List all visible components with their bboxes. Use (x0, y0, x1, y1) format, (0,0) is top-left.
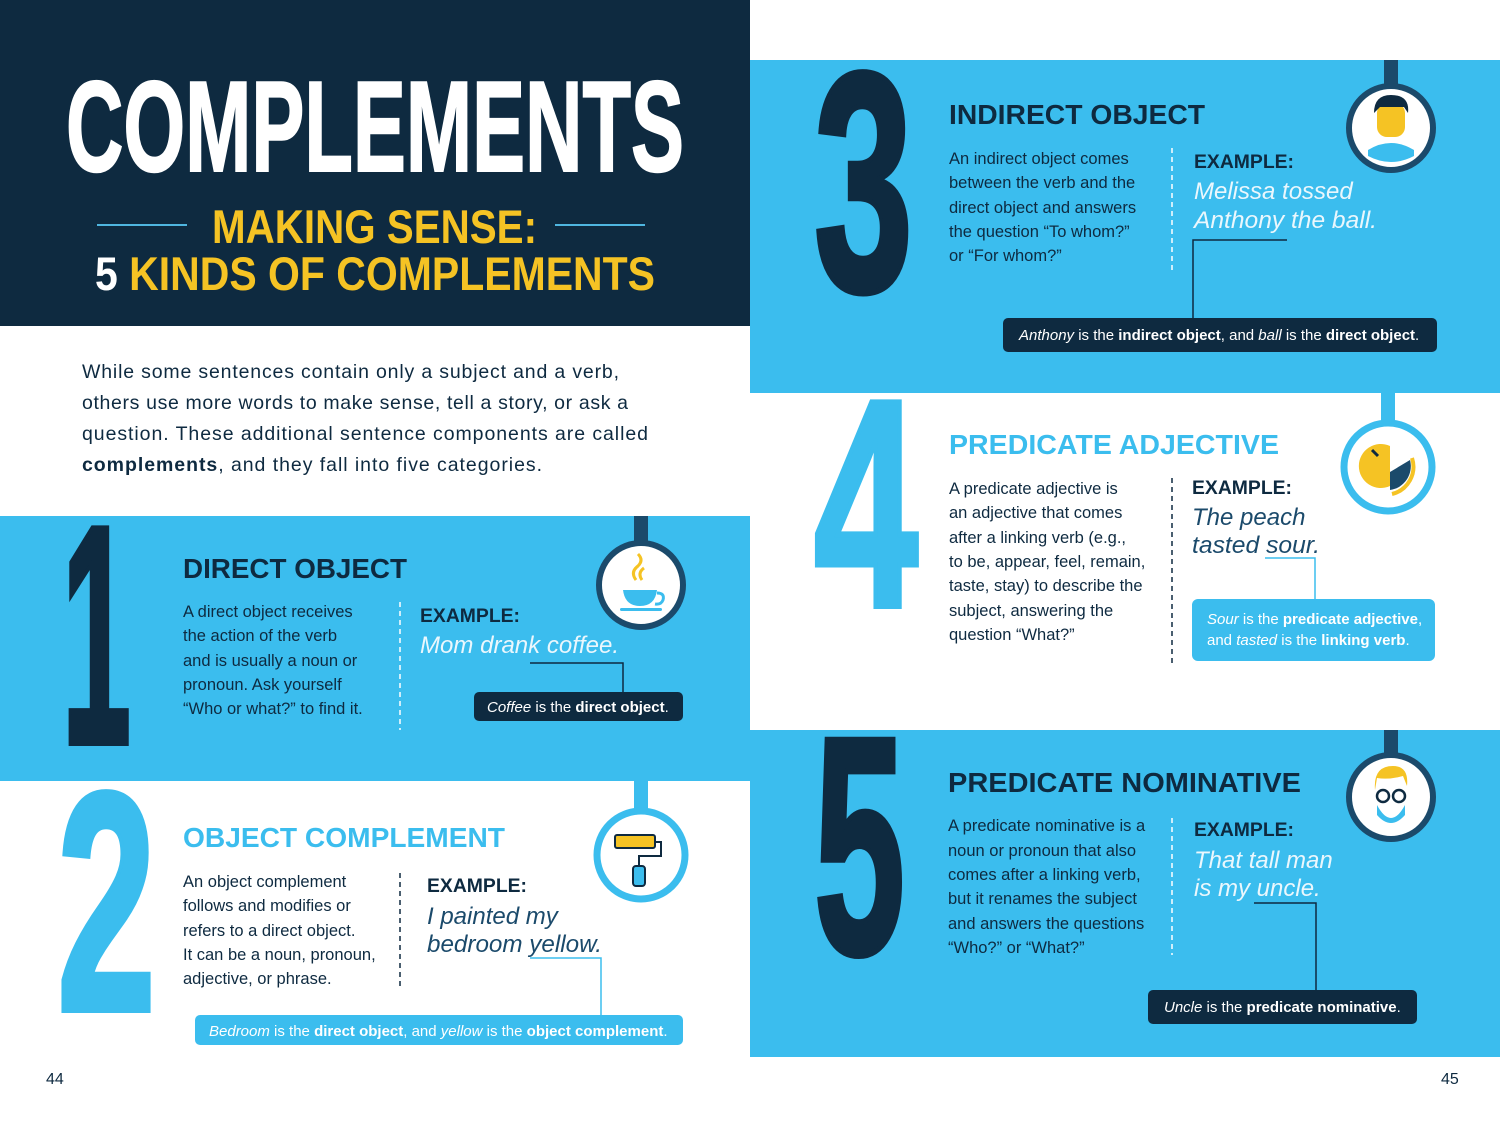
numeral 3: 3 (814, 9, 913, 357)
description: taste, stay) to describe the (949, 577, 1143, 595)
callout (195, 1015, 683, 1045)
description: the question “To whom?” (949, 223, 1130, 241)
heading: PREDICATE NOMINATIVE (948, 767, 1301, 798)
numeral 4: 4 (814, 338, 919, 669)
example: Anthony the ball. (1192, 207, 1377, 234)
description (949, 480, 1145, 644)
example: is my uncle. (1194, 875, 1321, 902)
callout (474, 692, 683, 721)
intro text (82, 361, 648, 476)
page number left: 44 (46, 1071, 64, 1088)
numeral 5: 5 (814, 672, 905, 1019)
description: after a linking verb (e.g., (949, 529, 1126, 547)
example: Melissa tossed (1194, 178, 1353, 205)
icon: man with stripes (1349, 60, 1433, 170)
description: A predicate adjective is (949, 480, 1118, 498)
intro text: While some sentences contain only a subject and a verb, (82, 361, 619, 383)
example (1192, 152, 1377, 234)
example: EXAMPLE: (1194, 820, 1294, 841)
header panel (0, 0, 750, 326)
example: EXAMPLE: (420, 606, 520, 627)
example: Mom drank coffee. (420, 632, 619, 659)
example: I painted my (427, 903, 560, 930)
subtitle (95, 200, 655, 300)
description: An indirect object comes (949, 150, 1129, 168)
panel 1: direct object (0, 462, 750, 810)
description: between the verb and the (949, 174, 1135, 192)
callout: Anthony is the indirect object, and ball is the direct object. (1018, 327, 1419, 344)
callout (1148, 990, 1417, 1024)
description (183, 873, 376, 988)
example (427, 876, 602, 958)
description (183, 603, 363, 718)
description: pronoun. Ask yourself (183, 676, 342, 694)
example: EXAMPLE: (427, 876, 527, 897)
example (1192, 478, 1320, 559)
example: That tall man (1194, 847, 1333, 874)
description: and is usually a noun or (183, 652, 358, 670)
description: An object complement (183, 873, 347, 891)
description: A direct object receives (183, 603, 353, 621)
description: direct object and answers (949, 199, 1136, 217)
heading: INDIRECT OBJECT (949, 99, 1205, 130)
description (948, 817, 1146, 957)
description (949, 150, 1136, 265)
description: but it renames the subject (948, 890, 1137, 908)
description: It can be a noun, pronoun, (183, 946, 376, 964)
heading: OBJECT COMPLEMENT (183, 822, 505, 853)
heading: PREDICATE ADJECTIVE (949, 429, 1279, 460)
subtitle: MAKING SENSE: (212, 200, 537, 253)
example (420, 606, 619, 659)
subtitle: 5 KINDS OF COMPLEMENTS (95, 247, 655, 300)
icon: lemon (1344, 393, 1432, 511)
example: tasted sour. (1192, 532, 1320, 559)
panel 1: direct object: 1 (62, 462, 131, 810)
description: or “For whom?” (949, 247, 1062, 265)
description: adjective, or phrase. (183, 970, 332, 988)
description: and answers the questions (948, 915, 1144, 933)
description: the action of the verb (183, 627, 337, 645)
description: “Who or what?” to find it. (183, 700, 363, 718)
icon: man with glasses (1349, 730, 1433, 839)
description: comes after a linking verb, (948, 866, 1141, 884)
example: EXAMPLE: (1192, 478, 1292, 499)
panel 4: predicate adjective (750, 330, 1435, 669)
description: subject, answering the (949, 602, 1113, 620)
example: EXAMPLE: (1194, 152, 1294, 173)
example: bedroom yellow. (427, 931, 602, 958)
callout (1192, 599, 1435, 661)
description: question “What?” (949, 626, 1075, 644)
panel 3: indirect object (750, 9, 1500, 393)
panel 5: predicate nominative (750, 672, 1500, 1057)
intro text: question. These additional sentence components are called (82, 423, 648, 445)
callout: Bedroom is the direct object, and yellow is the object complement. (209, 1023, 668, 1040)
icon: coffee cup (599, 516, 683, 627)
icon: paint roller (597, 781, 685, 899)
callout: Sour is the predicate adjective, (1207, 611, 1422, 628)
description: noun or pronoun that also (948, 842, 1136, 860)
numeral 2: 2 (57, 729, 156, 1077)
description: follows and modifies or (183, 897, 351, 915)
intro text: complements, and they fall into five categories. (82, 454, 542, 476)
example: The peach (1192, 504, 1305, 531)
heading: DIRECT OBJECT (183, 553, 407, 584)
description: A predicate nominative is a (948, 817, 1146, 835)
title: COMPLEMENTS (66, 55, 684, 199)
description: to be, appear, feel, remain, (949, 553, 1145, 571)
callout (1003, 318, 1437, 352)
panel 2: object complement (57, 729, 685, 1077)
callout: Coffee is the direct object. (487, 699, 669, 716)
callout: Uncle is the predicate nominative. (1164, 999, 1401, 1016)
callout: and tasted is the linking verb. (1207, 632, 1410, 649)
example (1194, 820, 1333, 902)
description: “Who?” or “What?” (948, 939, 1085, 957)
page number right: 45 (1441, 1071, 1459, 1088)
description: an adjective that comes (949, 504, 1122, 522)
description: refers to a direct object. (183, 922, 355, 940)
intro text: others use more words to make sense, tell a story, or ask a (82, 392, 628, 414)
